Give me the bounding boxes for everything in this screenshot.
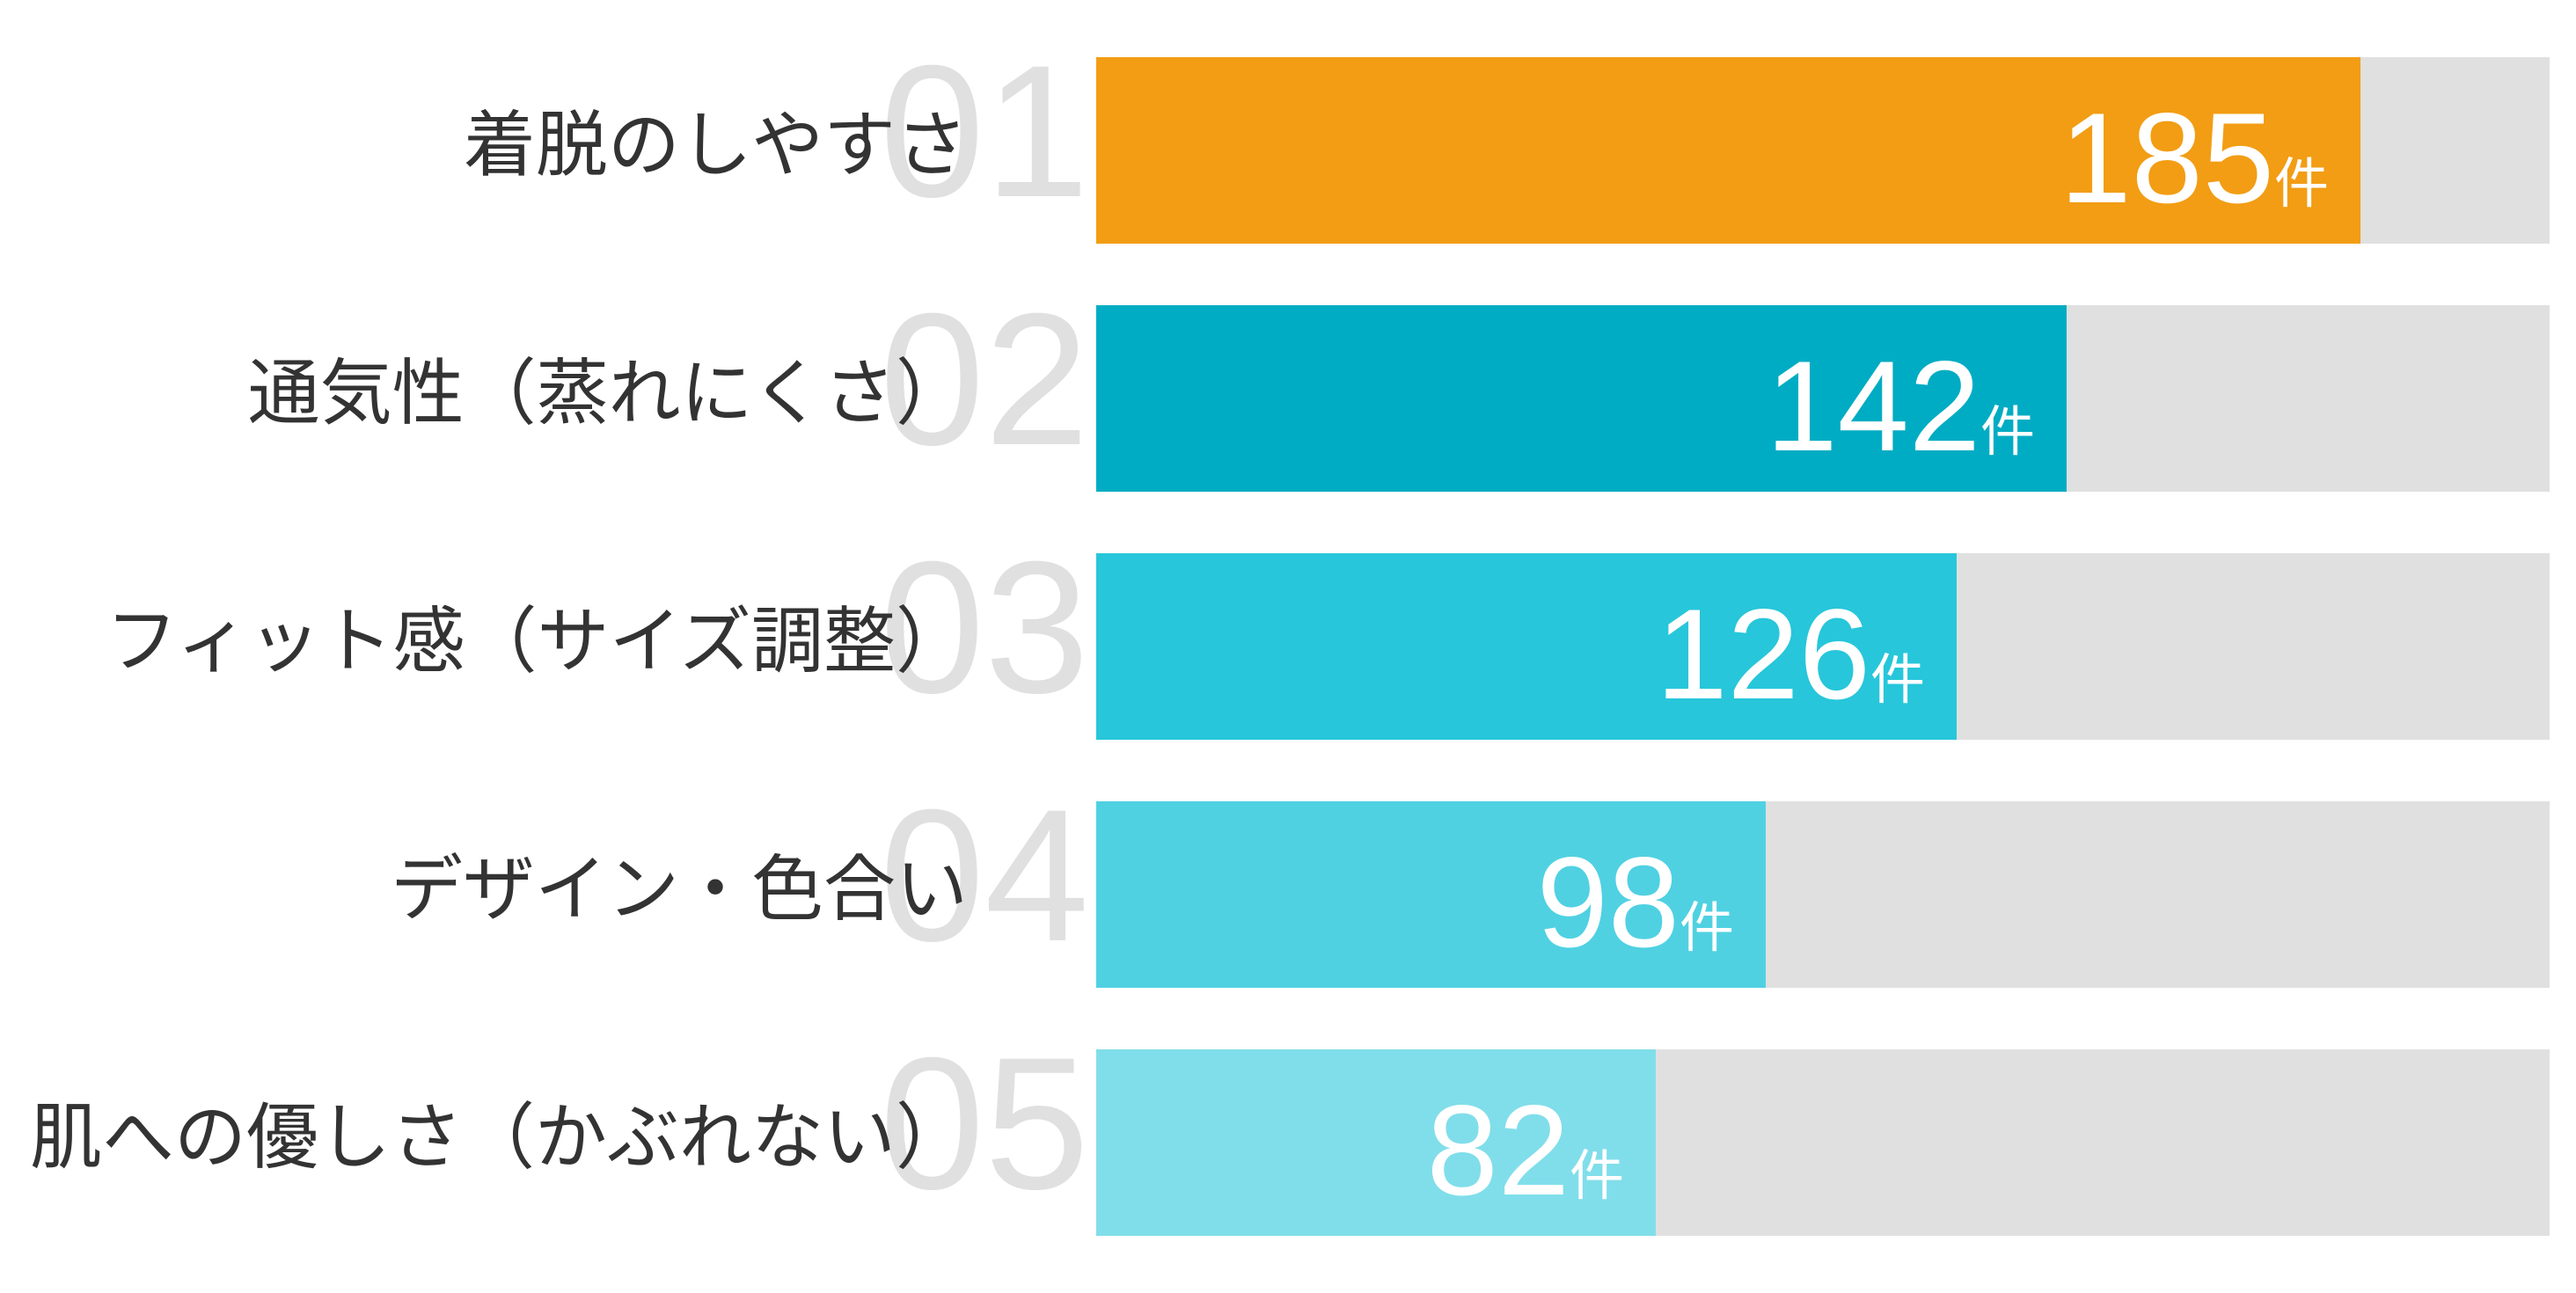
row 4 <box>391 771 2550 988</box>
bar track 1 <box>1096 57 2550 244</box>
label 4: デザイン・色合い <box>391 850 968 930</box>
rank number 05: 05 <box>880 1019 1089 1229</box>
label 1: 着脱のしやすさ <box>464 106 968 186</box>
label 5: 肌への優しさ（かぶれない） <box>30 1098 968 1178</box>
bar 5 <box>1096 1049 1656 1236</box>
row 5 <box>30 1019 2550 1236</box>
row 1 <box>464 26 2550 244</box>
bar track 2 <box>1096 305 2550 492</box>
bar 1 <box>1096 57 2360 244</box>
bar track 3 <box>1096 553 2550 740</box>
rank number 01: 01 <box>880 26 1089 237</box>
bar 5: 82件 <box>1427 1078 1624 1222</box>
bar 2 <box>1096 305 2067 492</box>
bar 4 <box>1096 801 1766 988</box>
row 3 <box>106 522 2550 740</box>
bar track 4 <box>1096 801 2550 988</box>
label 2: 通気性（蒸れにくさ） <box>248 354 968 434</box>
bar 3: 126件 <box>1656 582 1925 726</box>
rank number 04: 04 <box>880 771 1089 981</box>
row 2 <box>248 274 2550 492</box>
label 3: フィット感（サイズ調整） <box>106 602 968 682</box>
rank number 03: 03 <box>880 522 1089 733</box>
bar track 5 <box>1096 1049 2550 1236</box>
bar 4: 98件 <box>1537 830 1734 974</box>
bar 2: 142件 <box>1766 334 2035 478</box>
bar 3 <box>1096 553 1957 740</box>
rank number 02: 02 <box>880 274 1089 485</box>
bar 1: 185件 <box>2060 86 2329 230</box>
